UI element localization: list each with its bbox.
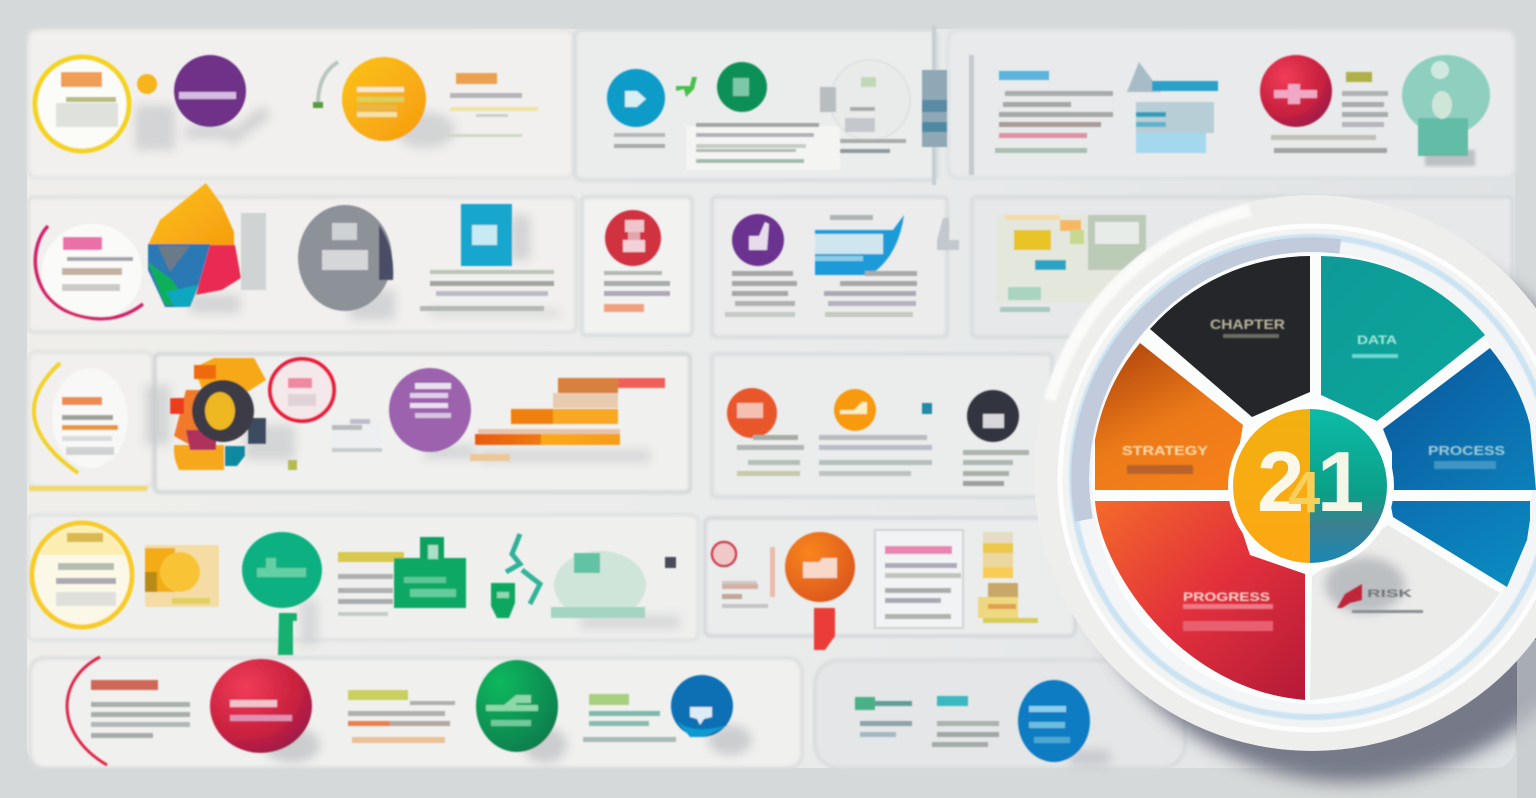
icon: purple circle xyxy=(174,55,246,127)
panel: row 4 right xyxy=(712,530,1038,650)
icon: pink mark xyxy=(712,542,775,608)
text block xyxy=(420,270,554,311)
drop shadow xyxy=(1072,238,1536,782)
wedge: teal xyxy=(1321,256,1485,421)
wedge labels: STRATEGY xyxy=(1122,443,1208,458)
icon: red ring badge xyxy=(270,359,334,421)
text block xyxy=(447,73,538,137)
wedge labels: RISK xyxy=(1367,588,1412,600)
icon: grey bubble xyxy=(298,205,393,311)
wedge: red xyxy=(1095,501,1305,700)
panel: row 2 xyxy=(35,183,1146,320)
icon: head silhouette xyxy=(1402,55,1490,166)
bar chart xyxy=(470,378,665,461)
panel: row 3 xyxy=(29,358,1029,491)
icon: green sprout xyxy=(491,534,540,618)
icon: ghost circle xyxy=(820,60,910,153)
icon: teal circle xyxy=(607,69,665,148)
icon: green circle xyxy=(242,532,322,608)
hub xyxy=(1228,403,1394,569)
white highlight crescent xyxy=(1050,210,1250,400)
icon: blue drop xyxy=(671,675,733,737)
blue rim xyxy=(1072,237,1536,717)
wedge labels: PROCESS xyxy=(1428,443,1505,458)
inner grey-blue rim xyxy=(1080,246,1340,520)
icon: green circle xyxy=(717,62,767,112)
wedge labels: DATA xyxy=(1357,333,1397,347)
soft shadows xyxy=(300,600,680,645)
icon: amber badge xyxy=(834,389,876,431)
text block xyxy=(725,271,917,317)
soft shadows xyxy=(145,385,650,462)
text block xyxy=(855,696,999,747)
wedge: blue lower xyxy=(1390,501,1530,587)
wedge labels: CHAPTER xyxy=(1210,316,1285,332)
icon: ruby circle xyxy=(1260,55,1332,127)
icon: small teal square xyxy=(922,403,932,414)
wedge: orange xyxy=(1095,343,1243,490)
icon: yellow ring badge xyxy=(32,523,132,627)
icon: red arc text xyxy=(67,657,190,765)
chart: blue tile xyxy=(1127,62,1218,153)
text block xyxy=(604,271,670,312)
icon: orange circle xyxy=(785,532,855,602)
icon: yellow ring badge xyxy=(35,57,157,151)
icon: red circle xyxy=(605,210,661,266)
map tile xyxy=(996,215,1146,312)
icon: amber circle xyxy=(313,57,426,141)
text block xyxy=(969,55,1113,175)
panel: row 1 left xyxy=(35,55,538,151)
text card xyxy=(875,530,963,628)
wedge labels: PROGRESS xyxy=(1183,590,1270,604)
panel: row 4 xyxy=(32,523,1038,655)
hub number xyxy=(1260,451,1362,512)
icon: yellow ring xyxy=(29,363,147,491)
chart: mint blob xyxy=(551,551,676,619)
icon: green connector xyxy=(278,613,297,655)
white inner ring xyxy=(1060,226,1536,730)
wheel wedges xyxy=(1095,256,1536,700)
icon: red connector xyxy=(814,608,835,650)
icon: blue circle xyxy=(1018,680,1090,762)
text block xyxy=(348,690,455,743)
icon: gear cluster xyxy=(170,358,297,470)
wedge labels xyxy=(1122,316,1505,631)
wedge: black xyxy=(1150,256,1310,417)
panel: row 1 right xyxy=(969,55,1490,175)
chart: blue wave xyxy=(815,215,904,275)
panel: row 1 middle xyxy=(607,25,947,185)
icon: crimson circle xyxy=(210,659,312,753)
icon: green circle xyxy=(476,660,558,752)
icon: blue doc xyxy=(461,204,512,266)
icon: pink ring xyxy=(35,224,143,320)
wheel base xyxy=(1144,252,1340,332)
chart: donut wheel xyxy=(1034,195,1536,798)
icon: small green arrow xyxy=(676,77,697,97)
hub shadow xyxy=(1325,557,1405,613)
hub number: 2 xyxy=(1257,435,1304,530)
wedge: pale xyxy=(1310,525,1500,700)
text block xyxy=(330,419,382,453)
hub number: 4 xyxy=(1288,460,1320,525)
icon: lilac circle xyxy=(389,368,471,452)
outer disc xyxy=(1034,195,1536,751)
icon: dark badge xyxy=(967,390,1019,442)
chart: striped column xyxy=(922,25,947,185)
icon: orange badge xyxy=(727,388,777,438)
soft shadows xyxy=(264,725,1110,766)
soft shadows xyxy=(190,215,560,320)
wedge: blue upper xyxy=(1383,348,1536,490)
text block xyxy=(338,552,404,616)
chart: gold cluster xyxy=(145,545,219,607)
panel: row 5 xyxy=(67,657,1110,766)
icon: violet circle xyxy=(732,214,784,266)
text block xyxy=(737,435,1029,486)
icon: grey connector xyxy=(937,218,959,250)
icon: green tile xyxy=(394,537,466,608)
text block xyxy=(583,694,676,742)
hub number: 1 xyxy=(1317,435,1364,530)
right frame over shadow xyxy=(1517,640,1536,798)
soft shadows xyxy=(135,105,455,150)
chart: polygon pie xyxy=(148,183,266,307)
text block xyxy=(1271,72,1388,153)
text card xyxy=(686,123,840,170)
icon: gold stack xyxy=(978,532,1038,623)
